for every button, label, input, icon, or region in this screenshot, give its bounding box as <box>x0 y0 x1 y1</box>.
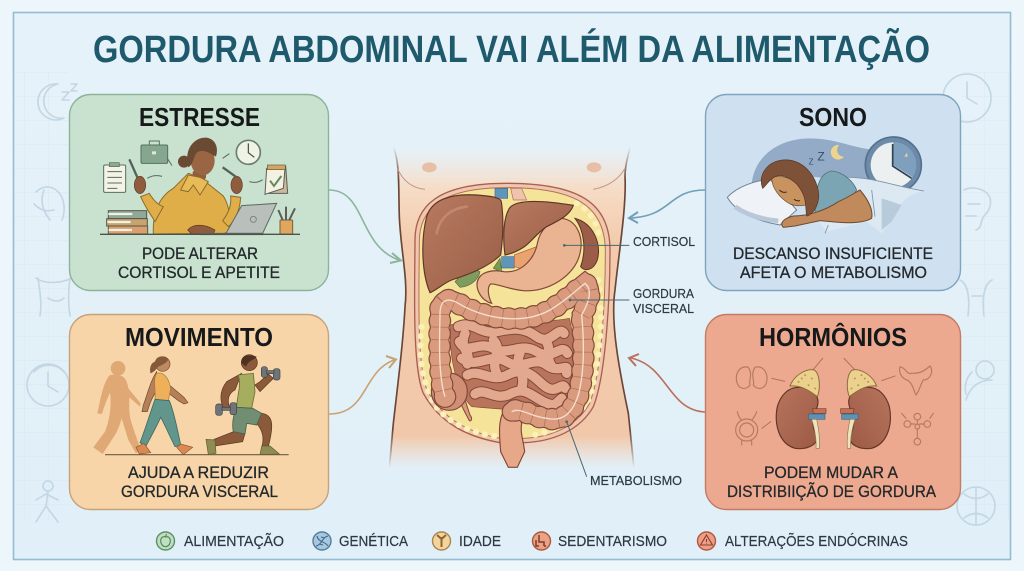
illustration: kidneys and adrenal glands <box>736 358 933 449</box>
caption: movimento <box>121 463 278 501</box>
decorative background icons right <box>943 74 995 525</box>
torso <box>389 147 634 468</box>
man with dumbbells <box>206 355 280 455</box>
laptop <box>200 203 277 234</box>
clipboard <box>104 163 126 192</box>
legend item: alimentacao: ALIMENTAÇÃO <box>184 533 284 550</box>
stomach <box>477 218 581 303</box>
legend item: alimentacao <box>156 532 284 550</box>
legend item: genetica: GENÉTICA <box>339 533 408 550</box>
briefcase <box>141 141 168 163</box>
abdominal cavity with visceral fat <box>415 183 610 443</box>
label: gordura visceral <box>633 286 694 316</box>
panel: sono <box>706 94 960 290</box>
caption: sono: AFETA O METABOLISMO <box>740 263 927 282</box>
spleen <box>575 218 598 270</box>
desk line <box>100 232 300 236</box>
legend row <box>156 532 908 550</box>
anatomy illustration: torso and organs <box>389 147 634 477</box>
left kidney <box>776 370 826 449</box>
heading: sono: SONO <box>799 102 867 132</box>
legend item: sedentarismo <box>532 532 667 550</box>
caption: hormonios <box>727 463 937 501</box>
legend item: sedentarismo: SEDENTARISMO <box>558 534 667 550</box>
caption: movimento: GORDURA VISCERAL <box>121 482 278 501</box>
large intestine colon <box>440 283 589 419</box>
legend item: alteracoes endocrinas: ALTERAÇÕES ENDÓCRINAS <box>725 533 908 550</box>
outline organ icons <box>736 358 933 445</box>
caption: sono: DESCANSO INSUFICIENTE <box>733 244 933 263</box>
arrow: movimento to abdomen <box>329 356 396 414</box>
rectum <box>499 407 525 467</box>
vessels at top <box>495 188 508 198</box>
right kidney <box>841 370 890 449</box>
label: metabolismo: METABOLISMO <box>590 473 682 488</box>
walking woman <box>136 356 193 455</box>
blanket <box>813 177 924 233</box>
panel: movimento <box>70 314 328 510</box>
arrow: hormonios to abdomen <box>629 354 705 412</box>
illustration: woman sleeping <box>727 137 924 233</box>
moon and sleep letters: Z <box>809 158 814 167</box>
heading: estresse: ESTRESSE <box>139 102 260 132</box>
leader lines <box>564 245 629 477</box>
motion strokes <box>147 154 263 182</box>
decorative background icons left <box>27 84 77 522</box>
caption: estresse: PODE ALTERAR <box>142 244 258 263</box>
moon and sleep letters <box>809 145 844 167</box>
illustration: stressed woman at laptop <box>100 138 300 234</box>
central vessels <box>502 257 514 268</box>
arrow: sono to abdomen <box>629 190 705 223</box>
moon and sleep letters: Z <box>817 150 825 164</box>
arrow: estresse to abdomen <box>329 190 401 263</box>
ground line <box>105 453 289 456</box>
cecum and appendix <box>460 400 472 421</box>
clock <box>236 140 260 164</box>
legend item: idade: IDADE <box>459 534 501 550</box>
woman <box>129 138 242 234</box>
panel: hormonios <box>706 314 960 510</box>
ghost silhouette <box>93 361 141 454</box>
calendar <box>265 165 288 194</box>
heading: movimento: MOVIMENTO <box>125 322 273 352</box>
books <box>107 211 148 234</box>
liver <box>423 195 503 293</box>
caption: movimento: AJUDA A REDUZIR <box>128 463 269 482</box>
panel: estresse <box>70 94 328 290</box>
caption: hormonios: PODEM MUDAR A <box>764 463 899 482</box>
caption: estresse <box>118 244 280 282</box>
caption: sono <box>733 244 933 282</box>
illustration: walking and lunging figures <box>93 355 289 455</box>
legend item: genetica <box>313 532 408 550</box>
small intestine <box>450 318 575 411</box>
heading: hormonios: HORMÔNIOS <box>759 322 907 352</box>
label: gordura visceral: GORDURA <box>633 286 694 301</box>
label: gordura visceral: VISCERAL <box>633 301 694 316</box>
sleeping woman <box>761 160 872 227</box>
clock <box>865 137 921 193</box>
legend item: idade <box>432 532 501 550</box>
label: cortisol: CORTISOL <box>633 234 695 249</box>
caption: estresse: CORTISOL E APETITE <box>118 263 280 282</box>
pillow <box>727 179 797 225</box>
gallbladder <box>455 270 480 287</box>
pencil cup <box>278 207 295 234</box>
night backdrop <box>752 138 887 187</box>
caption: hormonios: DISTRIBIIÇÃO DE GORDURA <box>727 482 937 501</box>
